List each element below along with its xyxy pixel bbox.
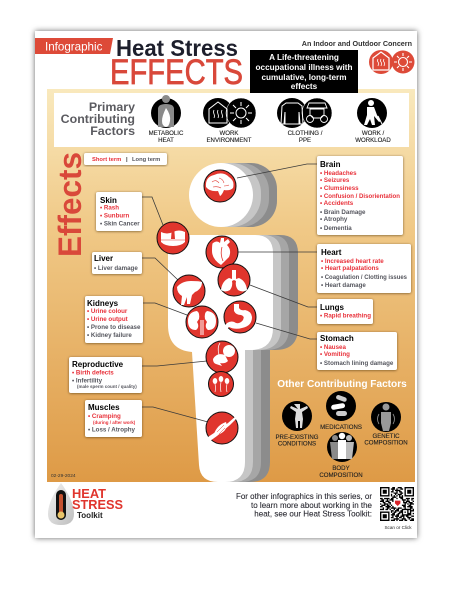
icon: liver (173, 275, 205, 307)
footer text: heat, see our Heat Stress Toolkit: (254, 510, 372, 518)
heading: primary contributing factors: Contributing (61, 112, 135, 126)
card: heart: • Heart palpatations (321, 265, 379, 272)
card: skin: • Skin Cancer (100, 220, 140, 228)
icon: work and workload (357, 98, 387, 128)
card: brain: • Seizures (320, 177, 350, 184)
callout: life-threatening illness: effects (291, 82, 318, 91)
label: clothing and ppe: CLOTHING / (288, 130, 323, 137)
card: liver: • Liver damage (94, 265, 138, 272)
card: brain: • Accidents (320, 200, 354, 207)
label: pre-existing conditions: CONDITIONS (278, 440, 316, 448)
label: genetic composition (364, 433, 408, 446)
card: muscles: • Cramping (88, 413, 121, 420)
icon: genetic composition (371, 402, 401, 432)
concern label: An Indoor and Outdoor Concern (302, 39, 412, 48)
heading: other contributing factors: Other Contributing Factors (277, 379, 407, 390)
footer text: to learn more about working in the (251, 501, 373, 510)
label: genetic composition: COMPOSITION (364, 440, 408, 446)
head (189, 163, 277, 227)
icon: fetus (206, 341, 238, 373)
card: heart: • Coagulation / Clotting issues (321, 274, 408, 281)
card: brain: • Dementia (320, 225, 352, 232)
card: skin: • Rash (100, 204, 119, 212)
card: kidneys: • Urine output (87, 316, 128, 323)
label: metabolic heat: METABOLIC (149, 130, 184, 137)
footer text (236, 492, 373, 518)
label: pre-existing conditions (275, 434, 319, 448)
card: stomach: Stomach (320, 334, 354, 343)
legend: short term and long term (84, 153, 167, 165)
card: kidneys: Kidneys (87, 299, 119, 308)
card: muscles: • Loss / Atrophy (88, 426, 136, 434)
label: work and workload (355, 130, 391, 144)
label: body composition: COMPOSITION (319, 472, 363, 479)
card: heart: • Increased heart rate (321, 258, 384, 265)
card: heart (317, 244, 411, 293)
card: heart: Heart (321, 248, 342, 257)
card: brain: Brain (320, 160, 341, 169)
label: metabolic heat: HEAT (158, 137, 174, 144)
legend: short term and long term: | (126, 157, 128, 163)
icon: indoor and outdoor (369, 50, 414, 74)
icon: lungs (218, 264, 250, 296)
callout: life-threatening illness: cumulative, long-term (261, 73, 347, 82)
logo: heat stress toolkit: HEAT (72, 486, 106, 501)
card: kidneys: • Prone to disease (87, 324, 141, 331)
card: reproductive: Reproductive (72, 360, 124, 369)
panel: orange background (47, 89, 415, 482)
card: lungs: Lungs (320, 303, 345, 312)
card: reproductive: • Infertility (72, 378, 103, 384)
icon: medications (326, 391, 356, 421)
card: skin (96, 192, 142, 231)
heading: primary contributing factors: Factors (90, 124, 135, 138)
icon: metabolic heat (151, 95, 181, 128)
icon: thermometer drop (48, 483, 74, 525)
infographic banner: Infographic (45, 40, 103, 54)
card: heart: • Heart damage (321, 282, 366, 289)
header (35, 35, 414, 92)
icon: muscle (206, 412, 238, 444)
card: skin: • Sunburn (100, 212, 130, 220)
logo: heat stress toolkit: STRESS (72, 497, 123, 512)
callout: life-threatening illness (250, 50, 358, 94)
card: liver: Liver (94, 254, 113, 263)
card: brain: • Atrophy (320, 216, 348, 223)
icon: pre-existing conditions (282, 401, 312, 431)
card: brain: • Brain Damage (320, 209, 366, 216)
label: genetic composition: GENETIC (372, 433, 400, 440)
label: work and workload: WORK / (362, 130, 384, 137)
label: clothing and ppe: PPE (299, 137, 311, 144)
title: effects: EFFECTS (110, 53, 243, 92)
card: reproductive: • Birth defects (72, 370, 114, 376)
logo: heat stress toolkit: Toolkit (77, 511, 103, 520)
card: brain: • Headaches (320, 170, 357, 177)
callout: life-threatening illness: A Life-threatening (269, 53, 339, 62)
card: skin: Skin (100, 196, 117, 205)
card: stomach: • Nausea (320, 344, 346, 351)
heading: primary contributing factors: Primary (89, 100, 135, 114)
label: metabolic heat (149, 130, 184, 144)
card: kidneys: • Urine colour (87, 308, 128, 315)
card: muscles (85, 400, 142, 437)
label: pre-existing conditions: PRE-EXISTING (275, 434, 319, 441)
label: body composition: BODY (332, 465, 350, 472)
icon: body composition (327, 432, 357, 462)
icon: brain (204, 170, 236, 202)
callout: life-threatening illness: occupational illness with (256, 63, 352, 72)
label: work environment: ENVIRONMENT (206, 137, 252, 144)
card: brain: • Confusion / Disorientation (320, 193, 400, 200)
page sheet (35, 31, 417, 538)
logo: heat stress toolkit (48, 483, 123, 525)
card: lungs: • Rapid breathing (320, 312, 371, 320)
label: work and workload: WORKLOAD (355, 137, 391, 144)
icon: kidneys (186, 306, 218, 338)
legend: short term and long term: Short term (92, 157, 121, 163)
card: reproductive: (male sperm count / quality) (77, 384, 137, 389)
card: muscles: Muscles (88, 403, 120, 412)
card: kidneys (85, 296, 143, 343)
card: brain (317, 156, 403, 235)
icon: work environment (203, 98, 256, 128)
card: stomach (317, 332, 397, 370)
label: medications: MEDICATIONS (320, 424, 362, 431)
icon: clothing and ppe (277, 98, 332, 128)
icon: skin (157, 222, 189, 254)
card: stomach: • Vomiting (320, 351, 350, 358)
label: work environment: WORK (220, 130, 238, 137)
body silhouette (168, 163, 298, 482)
label: body composition (319, 465, 363, 479)
card: lungs (317, 299, 373, 324)
heading: effects: Effects (52, 152, 88, 257)
connector lines (142, 164, 318, 422)
card: liver (92, 252, 142, 274)
card: stomach: • Stomach lining damage (320, 360, 394, 367)
date: 02-29-2024 (51, 473, 76, 479)
heading: primary contributing factors (61, 100, 135, 138)
card: brain: • Clumsiness (320, 185, 359, 192)
panel: primary contributing factors (54, 93, 409, 147)
icon: sperm (208, 372, 234, 396)
footer text: For other infographics in this series, or (236, 492, 372, 501)
card: muscles: (during / after work) (93, 420, 136, 425)
legend: short term and long term: Long term (132, 157, 160, 163)
qr code (380, 488, 414, 530)
label: clothing and ppe (288, 130, 323, 144)
icon: stomach (224, 301, 256, 333)
card: reproductive (69, 357, 142, 393)
card: kidneys: • Kidney failure (87, 332, 132, 339)
torso and legs (168, 235, 298, 482)
icon: heart (206, 236, 238, 268)
infographic banner (35, 38, 113, 54)
label: work environment (206, 130, 252, 144)
panel: other contributing factors (275, 379, 408, 479)
label: scan or click: Scan or Click (384, 525, 412, 530)
title: heat stress: Heat Stress (116, 35, 238, 61)
